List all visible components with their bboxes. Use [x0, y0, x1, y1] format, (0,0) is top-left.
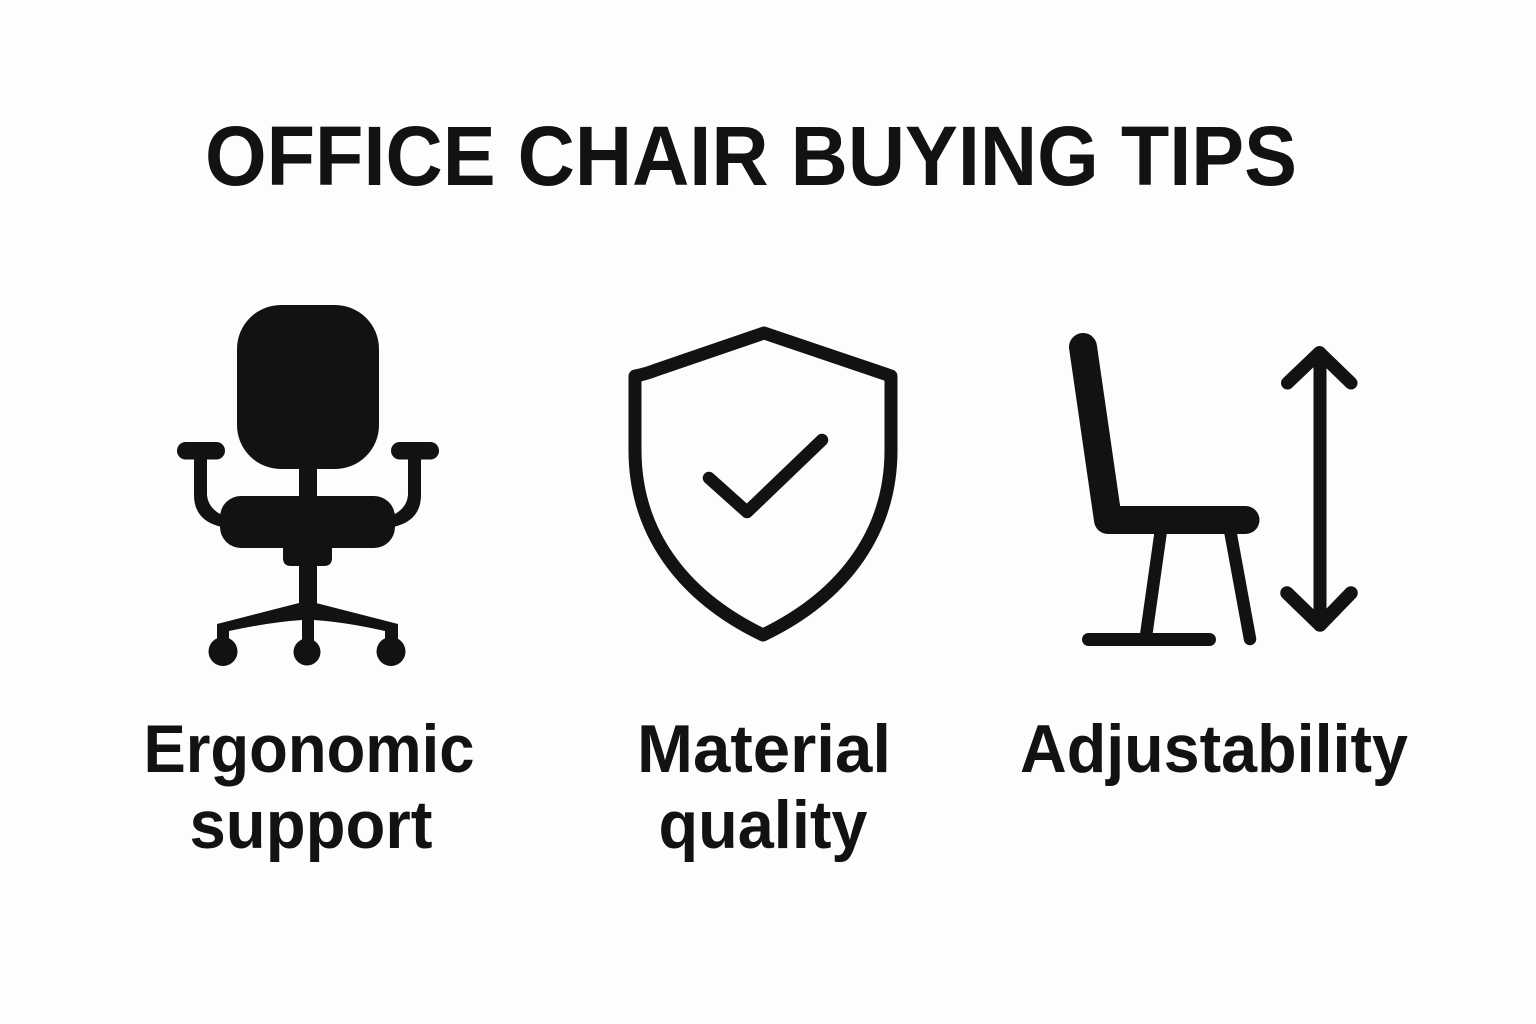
- label: material quality: quality: [658, 787, 868, 863]
- label: adjustability: Adjustability: [1020, 711, 1408, 787]
- icon: office chair: [177, 305, 439, 666]
- label: material quality: Material: [637, 711, 891, 787]
- label: ergonomic support: [144, 711, 474, 863]
- title: OFFICE CHAIR BUYING TIPS: [205, 109, 1297, 203]
- label: material quality: [637, 711, 891, 863]
- icon: adjustable chair with height arrow: [1083, 347, 1351, 640]
- icon: shield with check: [635, 333, 891, 635]
- label: ergonomic support: Ergonomic: [144, 711, 474, 787]
- label: ergonomic support: support: [190, 787, 432, 863]
